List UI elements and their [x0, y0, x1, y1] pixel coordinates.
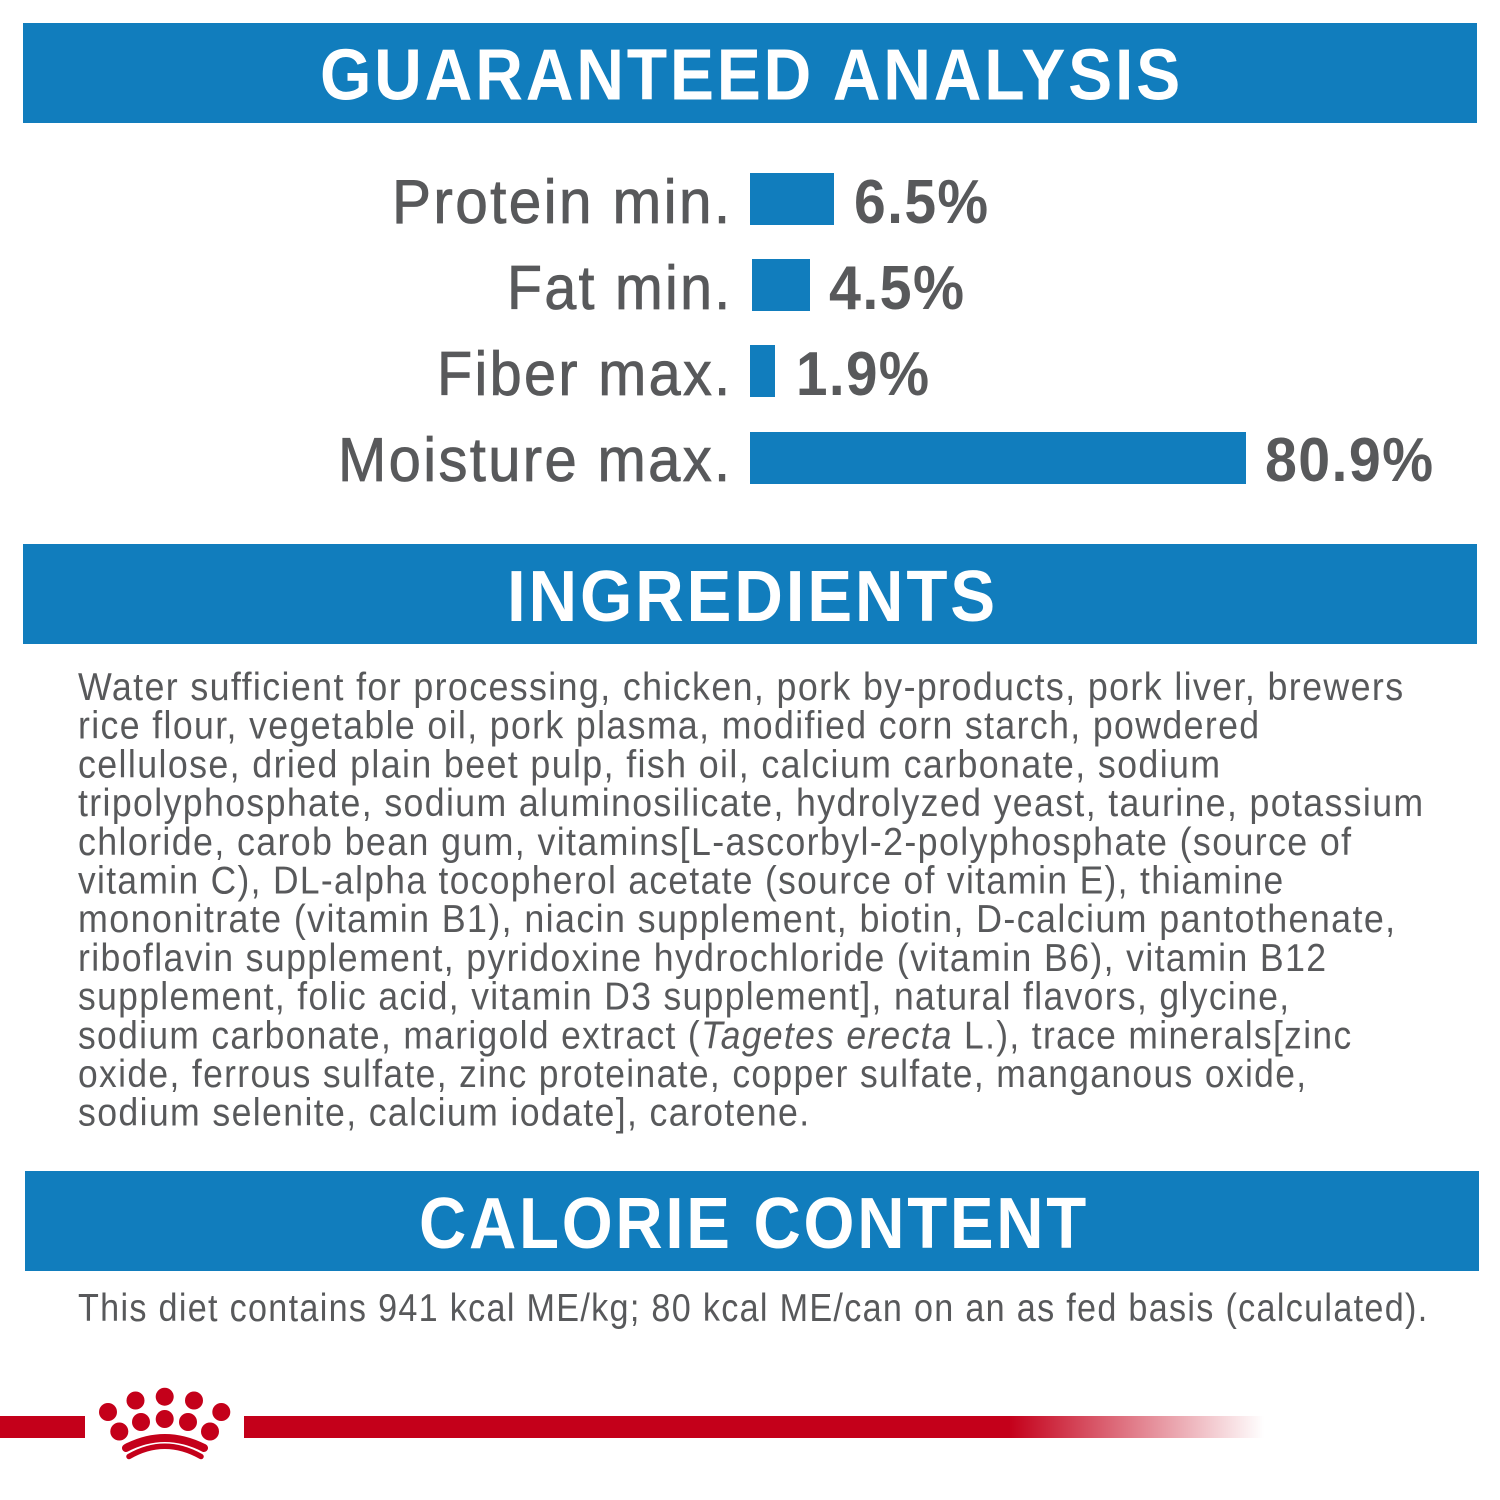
icon: royal canin crown logo [99, 1388, 230, 1456]
header: calorie content [25, 1171, 1479, 1271]
row: fiber [437, 340, 930, 409]
text block: ingredients list: sodium selenite, calcium iodate], carotene. [78, 1092, 810, 1135]
text block: ingredients list [78, 666, 1424, 1135]
row: protein: 6.5% [854, 168, 990, 237]
text block: ingredients list: cellulose, dried plain beet pulp, fish oil, calcium carbonate, sodium [78, 743, 1222, 786]
text block: ingredients list: rice flour, vegetable oil, pork plasma, modified corn starch, powdered [78, 705, 1260, 748]
header: guaranteed analysis: GUARANTEED ANALYSIS [320, 36, 1183, 116]
row: moisture: 80.9% [1265, 426, 1434, 495]
text block: ingredients list: supplement, folic acid, vitamin D3 supplement], natural flavors, glycine, [78, 976, 1290, 1019]
text block: ingredients list: vitamin C), DL-alpha tocopherol acetate (source of vitamin E), thiamine [78, 860, 1284, 902]
header: ingredients [23, 544, 1477, 644]
text block: ingredients list: chloride, carob bean gum, vitamins[L-ascorbyl-2-polyphosphate (source of [78, 821, 1352, 864]
text block: ingredients list: riboflavin supplement, pyridoxine hydrochloride (vitamin B6), vitamin B12 [78, 937, 1328, 980]
row: fat: 4.5% [829, 254, 966, 323]
text block: ingredients list: oxide, ferrous sulfate, zinc proteinate, copper sulfate, manganous oxide, [78, 1053, 1308, 1096]
bar chart: guaranteed analysis [338, 168, 1434, 495]
text block: ingredients list: mononitrate (vitamin B1), niacin supplement, biotin, D-calcium pantothenate, [78, 898, 1396, 941]
row: fiber: Fiber max. [437, 340, 732, 409]
header: calorie content: CALORIE CONTENT [419, 1184, 1089, 1264]
row: fiber: 1.9% [796, 340, 930, 409]
row: protein [392, 168, 990, 237]
red band: right segment fading out [244, 1416, 1264, 1438]
row: moisture [338, 426, 1434, 495]
red band: left segment [0, 1416, 85, 1438]
row: moisture: Moisture max. [338, 426, 732, 495]
header: guaranteed analysis [23, 23, 1477, 123]
header: ingredients: INGREDIENTS [507, 557, 998, 637]
row: fat: Fat min. [507, 254, 732, 323]
text block: ingredients list: sodium carbonate, marigold extract (Tagetes erecta L.), trace minerals[zinc [78, 1014, 1352, 1057]
row: fat [507, 254, 966, 323]
text block: ingredients list: Water sufficient for processing, chicken, pork by-products, pork liver, brewers [78, 666, 1404, 709]
row: protein: Protein min. [392, 168, 732, 237]
